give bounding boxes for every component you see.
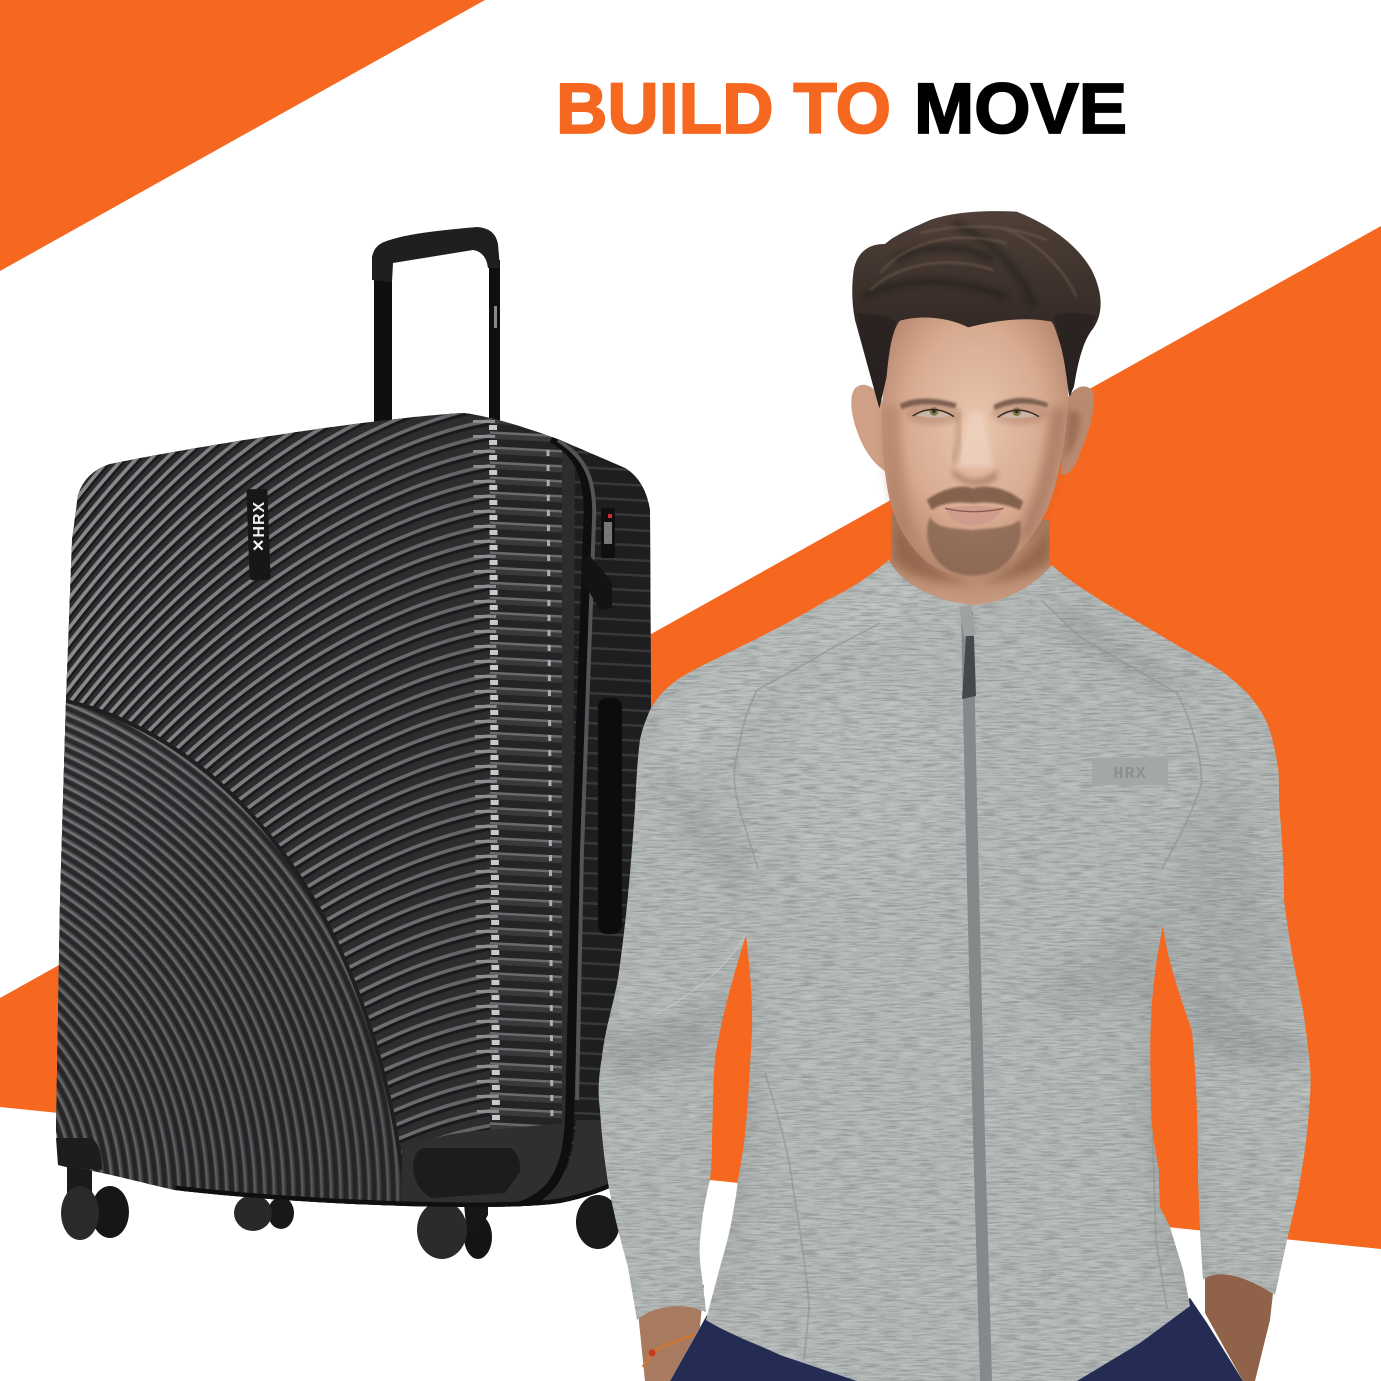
left front wheels	[61, 1165, 129, 1240]
right hand	[1205, 1260, 1275, 1381]
far wheels	[234, 1195, 620, 1249]
lips	[945, 506, 1003, 526]
brand tag: ✕HRX	[251, 501, 268, 552]
upper curved ribs	[56, 413, 509, 1204]
combination lock	[583, 508, 615, 610]
zip tape	[967, 612, 986, 1381]
eyebrows	[900, 398, 1048, 410]
telescopic handle	[372, 227, 500, 425]
rib hooks	[548, 450, 552, 1125]
title: MOVE	[914, 70, 1127, 149]
chest logo	[1092, 758, 1168, 785]
title: BUILD TO	[556, 70, 891, 149]
jacket heather texture	[590, 550, 1320, 1381]
right wheel housing	[413, 1148, 520, 1198]
neck	[890, 513, 1050, 605]
side carry handle	[598, 698, 622, 934]
orange diagonal band	[0, 226, 1381, 1249]
moustache	[927, 487, 1023, 510]
suitcase body	[56, 413, 651, 1207]
zipper	[515, 438, 588, 1208]
eyes	[913, 407, 1039, 418]
orange triangle top left	[0, 0, 485, 271]
left hand and thread	[637, 1285, 704, 1381]
neck shadow	[893, 520, 1050, 584]
hair light strands	[870, 227, 1077, 297]
corner highlights	[484, 420, 488, 1125]
right front wheels	[417, 1183, 492, 1259]
bottom edge shadow	[175, 1184, 609, 1207]
goatee	[927, 517, 1021, 575]
face shading	[883, 402, 1067, 547]
title	[556, 70, 1127, 149]
flat lower corner	[402, 1122, 575, 1210]
zip top	[965, 606, 970, 636]
head	[851, 211, 1101, 576]
grey jacket	[590, 550, 1320, 1381]
arc divider	[62, 700, 402, 1170]
navy trousers	[670, 1298, 1243, 1381]
jacket shading	[603, 570, 1308, 1320]
horizontal ribbed corner band	[490, 405, 562, 1130]
zip pull	[962, 636, 976, 699]
suitcase	[56, 227, 651, 1259]
brand tag	[246, 489, 271, 580]
ear shadows	[1065, 411, 1080, 457]
side panel	[560, 430, 655, 1210]
hair dark streaks	[863, 223, 1033, 307]
left wheel housing	[56, 1138, 102, 1170]
ears	[851, 385, 886, 472]
chest logo: HRX	[1113, 765, 1147, 784]
person	[590, 211, 1320, 1381]
hair sides darker	[857, 313, 897, 407]
face	[882, 313, 1068, 576]
hair	[852, 211, 1101, 408]
sleeve and pocket seams	[734, 600, 1201, 1361]
side panel lower plain	[545, 1120, 609, 1205]
elbow seam	[655, 935, 746, 1015]
lower concentric ribs	[56, 701, 408, 1206]
